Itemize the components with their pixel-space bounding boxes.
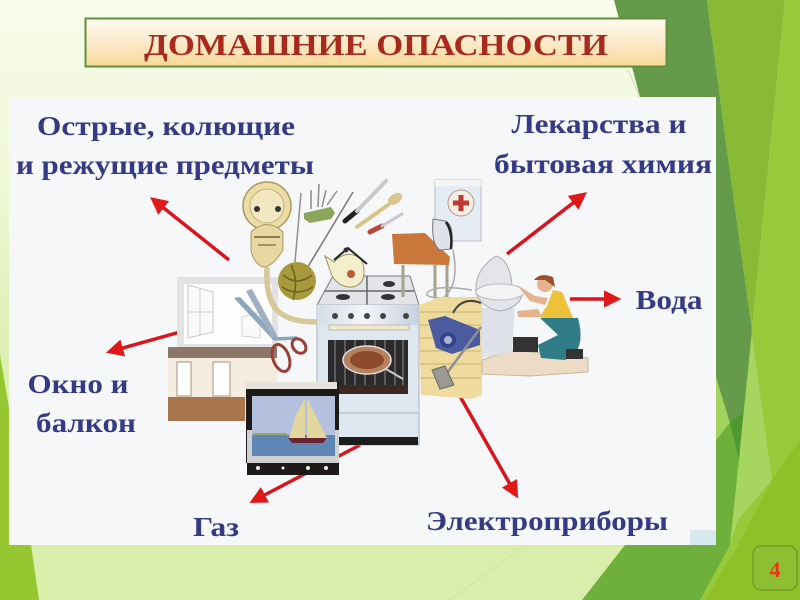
illustration: stool and iron bbox=[392, 219, 472, 298]
illustration: scissors bbox=[234, 289, 309, 374]
illustration: teapot bbox=[325, 248, 367, 287]
label: medicine and chemicals: Лекарства и bbox=[512, 109, 686, 139]
arrow: to sharp objects bbox=[155, 201, 229, 260]
arrow: to medicine bbox=[507, 196, 582, 254]
page number badge bbox=[753, 546, 797, 590]
label: window and balcony bbox=[28, 369, 136, 438]
label: gas: Газ bbox=[193, 512, 239, 542]
arrow: to gas bbox=[255, 445, 360, 500]
illustration: plumber bbox=[517, 275, 583, 360]
corner tint bbox=[690, 530, 716, 545]
illustration: sink bbox=[476, 256, 588, 376]
label: medicine and chemicals: бытовая химия bbox=[494, 149, 712, 179]
arrow: to appliances bbox=[457, 391, 515, 493]
illustration: brick wall and vacuum cleaner bbox=[419, 297, 482, 399]
illustration: socket and plug bbox=[243, 182, 318, 322]
label: sharp objects bbox=[16, 111, 314, 180]
label: sharp objects: Острые, колющие bbox=[37, 111, 295, 141]
illustration: cutlery bbox=[345, 181, 404, 232]
label: window and balcony: Окно и bbox=[28, 369, 128, 399]
illustration: television bbox=[246, 382, 339, 475]
illustration: window and balcony bbox=[168, 277, 278, 421]
title banner bbox=[86, 18, 666, 66]
label: water: Вода bbox=[636, 285, 703, 315]
illustration: pin cushion bbox=[304, 184, 337, 223]
cable bbox=[267, 267, 318, 322]
illustration: yarn and needles bbox=[278, 192, 353, 300]
title text: ДОМАШНИЕ ОПАСНОСТИ bbox=[144, 27, 608, 62]
label: medicine and chemicals bbox=[494, 109, 712, 179]
illustration: gas stove bbox=[317, 276, 419, 445]
illustration: first aid cabinet bbox=[435, 180, 481, 241]
label: electrical appliances: Электроприборы bbox=[426, 506, 668, 536]
label: sharp objects: и режущие предметы bbox=[16, 150, 314, 180]
page number: 4 bbox=[770, 557, 780, 582]
label: window and balcony: балкон bbox=[36, 408, 136, 438]
arrow: to water bbox=[570, 297, 615, 301]
arrow: to window bbox=[112, 332, 180, 351]
main white panel bbox=[9, 97, 716, 545]
